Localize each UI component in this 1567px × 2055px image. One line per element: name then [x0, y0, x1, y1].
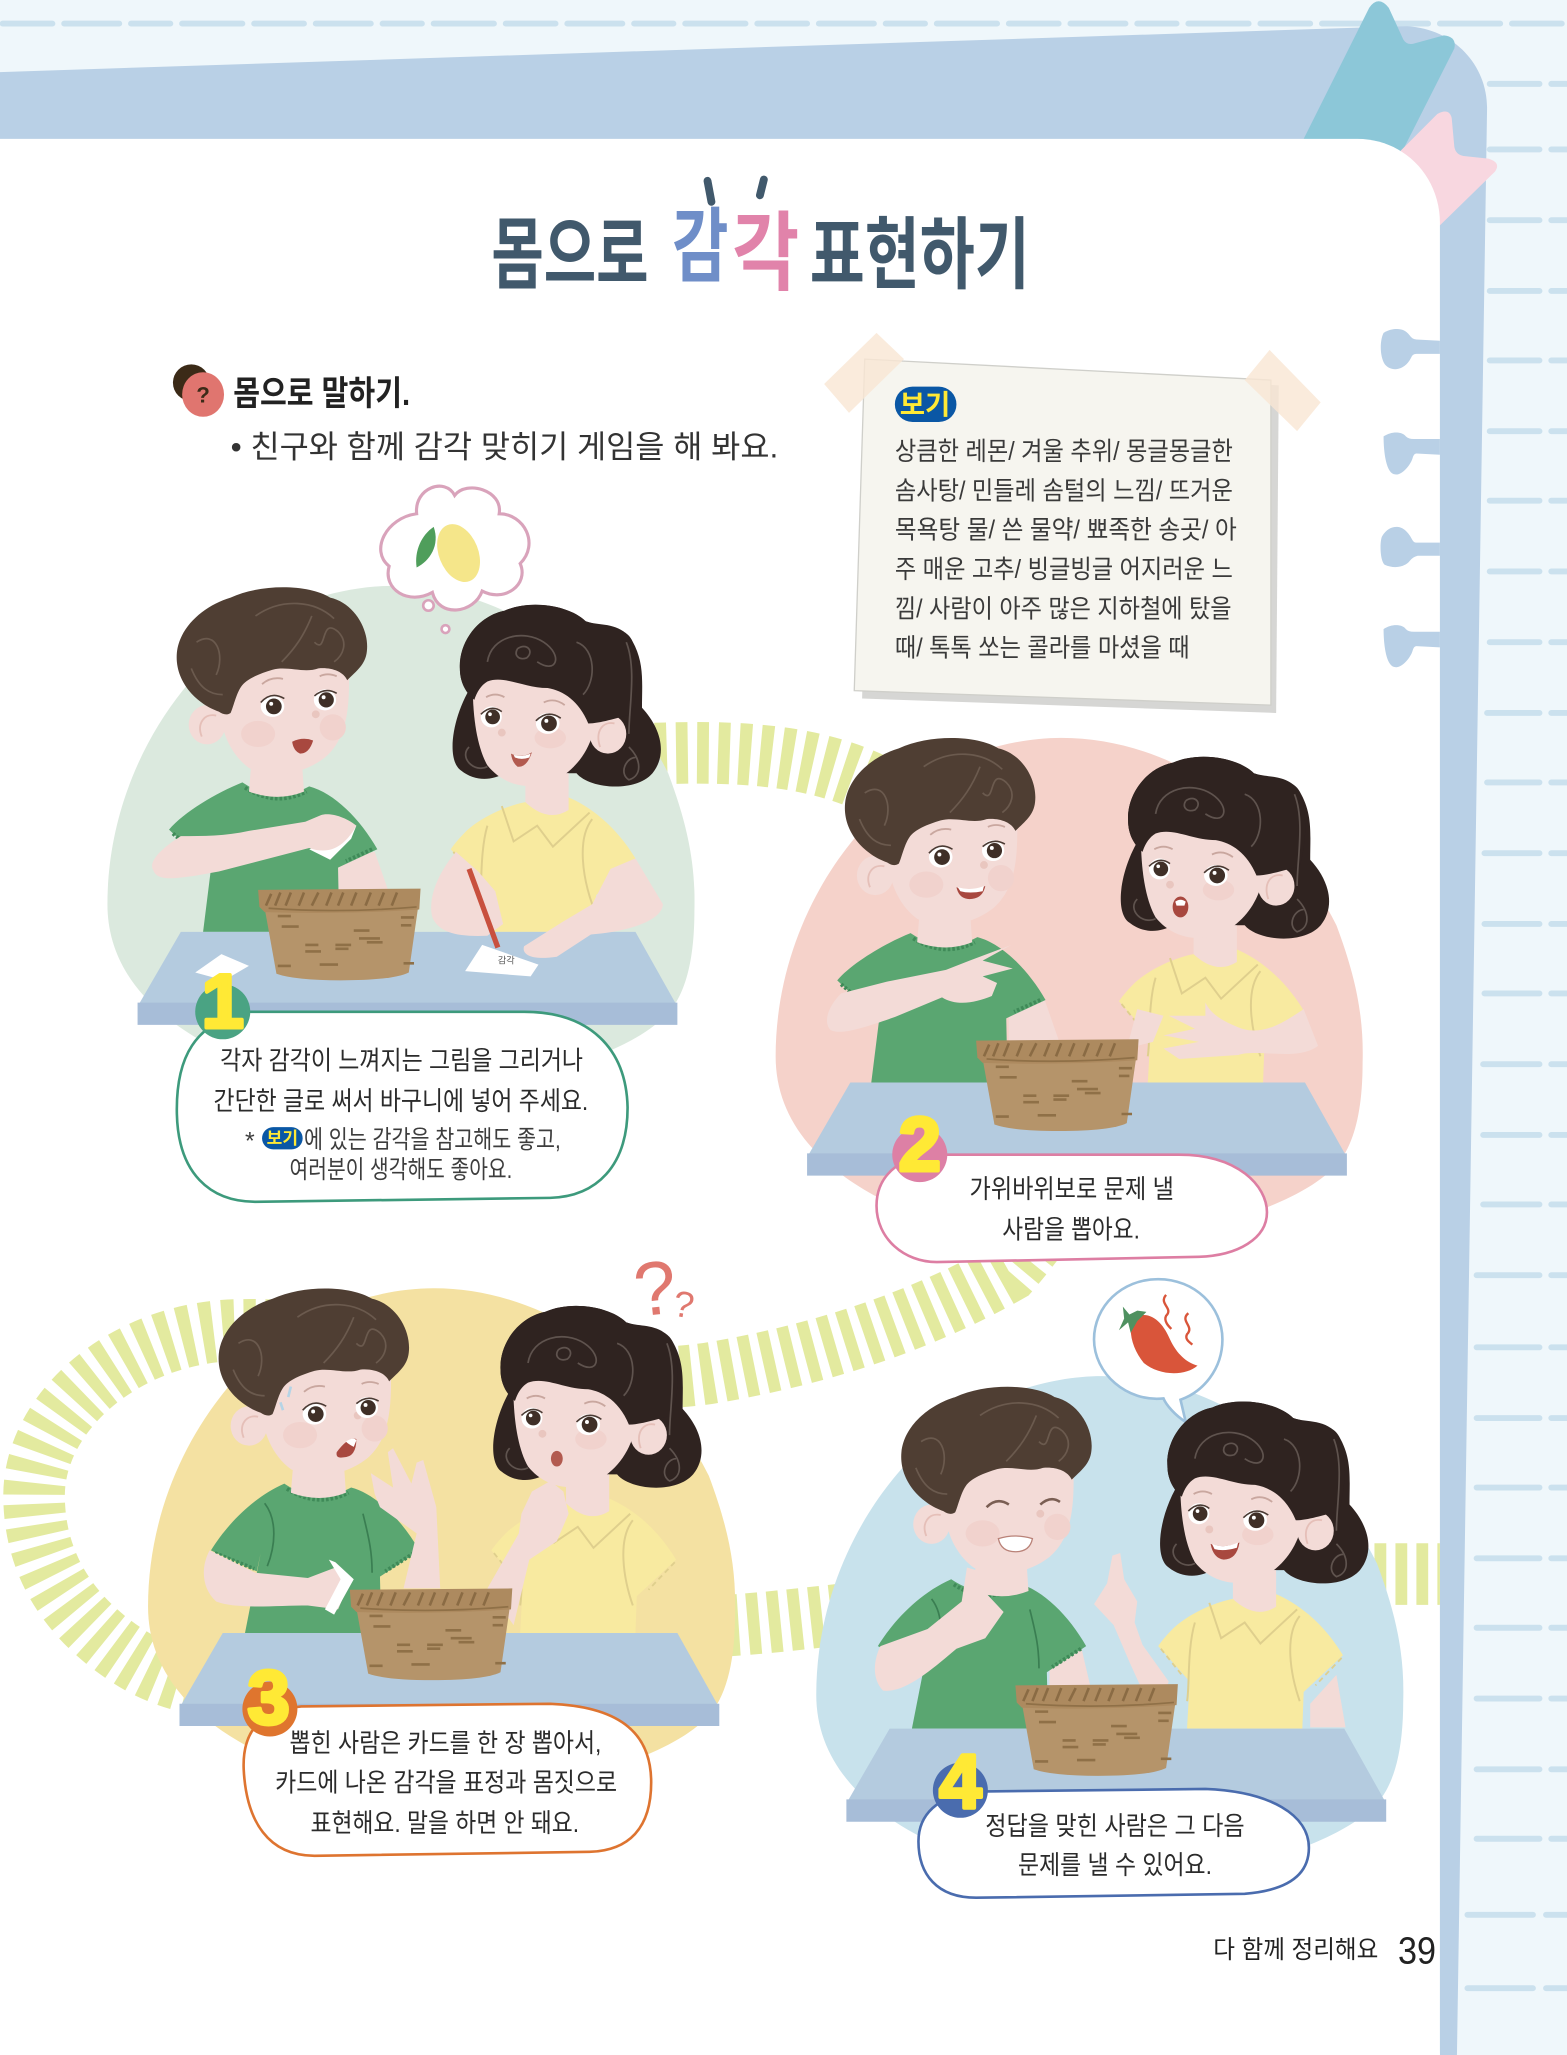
callout 4: 4 [939, 1739, 982, 1824]
callout 2: 사람을 뽑아요. [1002, 1215, 1140, 1245]
girl [487, 1306, 702, 1633]
callout 2: 2 [899, 1102, 941, 1187]
scene 4: correct answer [816, 1279, 1403, 1898]
section heading with question icon: 몸으로 말하기. [233, 375, 410, 413]
girl [451, 605, 661, 932]
page footer [1213, 1930, 1436, 1972]
boy [204, 1288, 440, 1633]
binding rings [1381, 329, 1440, 667]
table [846, 1729, 1386, 1822]
thought bubble: lemon [381, 486, 529, 633]
callout 1: 여러분이 생각해도 좋아요. [290, 1156, 512, 1184]
table [179, 1633, 719, 1726]
callout 1: 각자 감각이 느껴지는 그림을 그리거나 [220, 1045, 583, 1075]
callout 4: 정답을 맞힌 사람은 그 다음 [985, 1811, 1245, 1841]
cards on table [195, 945, 538, 980]
speech bubble: chili [1094, 1279, 1222, 1422]
note panel: examples: 목욕탕 물/ 쓴 물약/ 뾰족한 송곳/ 아 [895, 517, 1237, 545]
callout 3: 3 [247, 1655, 290, 1740]
title: 감 [672, 202, 728, 293]
note panel: examples: 낌/ 사람이 아주 많은 지하철에 탔을 [895, 595, 1232, 623]
callout 1: 에 있는 감각을 참고해도 좋고, [304, 1126, 561, 1154]
callout 3: 표현해요. 말을 하면 안 돼요. [311, 1808, 579, 1838]
girl arms and pencil [431, 852, 663, 958]
pink backdrop [776, 738, 1363, 1230]
basket [258, 889, 421, 980]
callout 2: 가위바위보로 문제 낼 [970, 1174, 1174, 1204]
note panel: examples: 주 매운 고추/ 빙글빙글 어지러운 느 [895, 556, 1233, 584]
callout 3: 카드에 나온 감각을 표정과 몸짓으로 [275, 1768, 617, 1798]
table [138, 932, 677, 1025]
cards on table: 감각 [498, 954, 515, 965]
green backdrop [107, 586, 695, 1078]
callout 3: 뽑힌 사람은 카드를 한 장 뽑아서, [290, 1728, 601, 1758]
girl [1094, 1402, 1368, 1729]
scene 3: acting out [148, 1245, 735, 1856]
pink bookmark [1401, 112, 1497, 225]
question marks: ? [630, 1245, 681, 1333]
yellow backdrop [148, 1288, 735, 1781]
title: 표현하기 [810, 211, 1030, 299]
callout 2 [877, 1102, 1267, 1262]
basket [350, 1588, 512, 1680]
boy [827, 738, 1064, 1083]
title: 몸으로 [491, 211, 649, 299]
callout 4: 문제를 낼 수 있어요. [1018, 1850, 1212, 1880]
basket [976, 1039, 1139, 1131]
note panel: examples: 솜사탕/ 민들레 솜털의 느낌/ 뜨거운 [895, 477, 1233, 505]
blue backdrop [816, 1376, 1403, 1868]
note panel: examples [824, 333, 1321, 713]
callout 1: 1 [202, 959, 244, 1045]
scene 2: rock paper scissors [776, 738, 1363, 1262]
note panel: examples: 상큼한 레몬/ 겨울 추위/ 몽글몽글한 [895, 438, 1233, 466]
callout 3 [242, 1655, 651, 1856]
callout 1: 보기 [267, 1129, 298, 1148]
page footer: 39 [1398, 1930, 1436, 1972]
callout 1 [177, 959, 628, 1202]
section heading with question icon [173, 364, 410, 417]
scene 1: drawing cards [107, 486, 695, 1202]
note panel: examples: 때/ 톡톡 쏘는 콜라를 마셨을 때 [895, 635, 1190, 663]
winding striped path [34, 753, 1440, 1691]
boy [875, 1387, 1092, 1729]
callout 1: 간단한 글로 써서 바구니에 넣어 주세요. [214, 1086, 588, 1116]
section heading with question icon: ? [196, 382, 210, 407]
callout 4 [918, 1739, 1309, 1898]
basket [1015, 1684, 1178, 1776]
note panel: examples: 보기 [900, 389, 950, 420]
title: 각 [732, 206, 799, 302]
callout 1: * [245, 1127, 255, 1155]
table [807, 1083, 1347, 1176]
boy [152, 587, 393, 932]
teal bookmark [1302, 1, 1455, 155]
instruction text: • 친구와 함께 감각 맞히기 게임을 해 봐요. [231, 429, 778, 464]
question marks: ? [670, 1283, 697, 1327]
page footer: 다 함께 정리해요 [1213, 1936, 1378, 1964]
title [491, 180, 1030, 302]
girl [1119, 757, 1329, 1084]
